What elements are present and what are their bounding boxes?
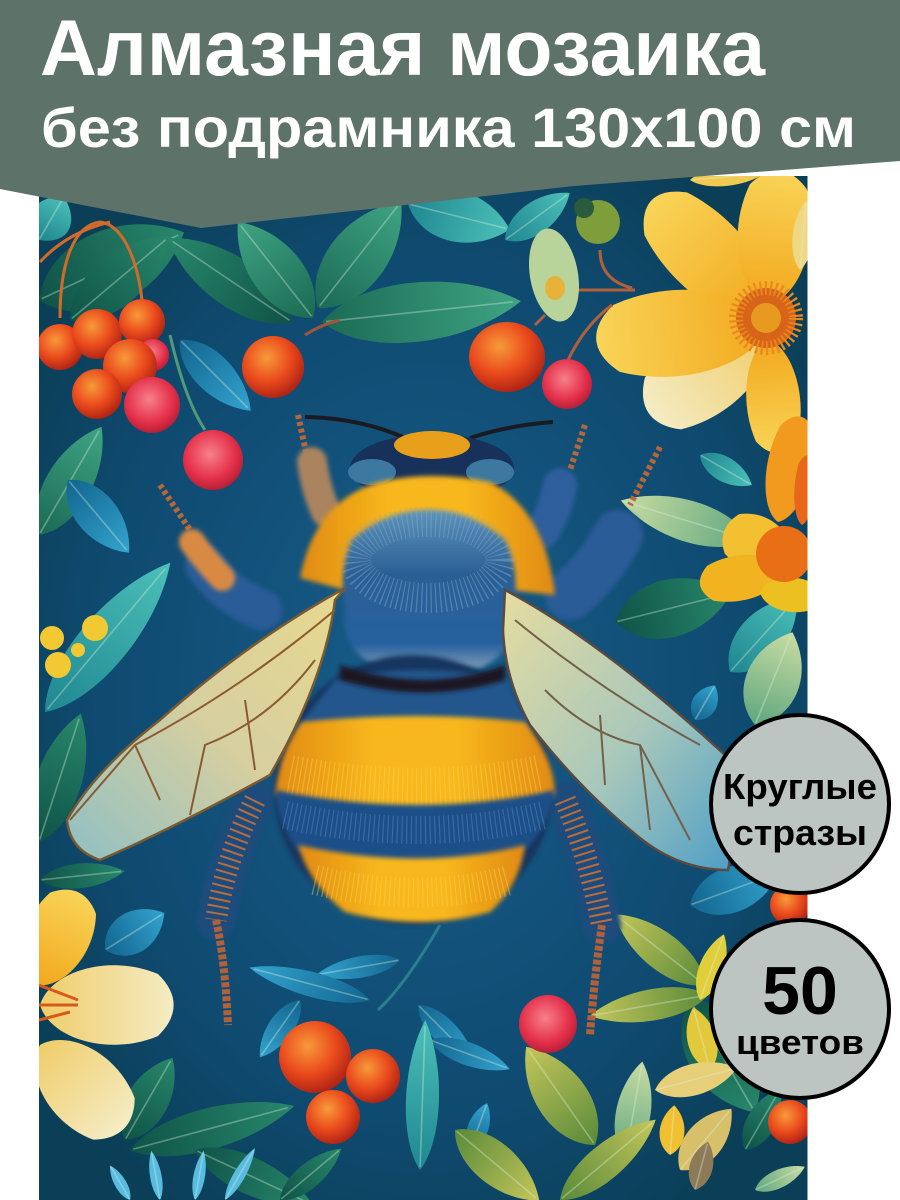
top right flower xyxy=(596,176,808,452)
top foliage xyxy=(21,179,579,424)
badge: 50 colours xyxy=(711,920,889,1098)
bottom left flower xyxy=(39,890,310,1200)
bee abdomen xyxy=(274,655,555,925)
yellow blossoms at left xyxy=(40,615,108,678)
badge: round rhinestones xyxy=(711,715,889,893)
bottom centre foliage xyxy=(246,925,667,1200)
blue stripe xyxy=(275,790,555,862)
upper yellow stripe xyxy=(275,716,555,810)
right wing xyxy=(503,590,730,870)
badge: round rhinestones: Круглые xyxy=(723,766,877,807)
small pale pod xyxy=(522,198,620,325)
lower yellow stripe xyxy=(298,845,525,922)
badge: 50 colours: 50 xyxy=(762,953,838,1029)
bee thorax xyxy=(343,510,516,668)
subtitle: без подрамника 130х100 см xyxy=(41,96,856,159)
right foliage xyxy=(608,170,823,926)
bee thorax collar xyxy=(300,476,555,595)
badge: 50 colours: цветов xyxy=(736,1024,864,1062)
thorax fur xyxy=(356,522,500,598)
upper dark band xyxy=(295,670,535,730)
berries xyxy=(37,299,812,1144)
left foliage xyxy=(39,426,170,956)
header banner xyxy=(0,0,900,228)
berry stems xyxy=(40,222,635,430)
left wing xyxy=(67,588,345,860)
lower yellow fur xyxy=(315,880,510,892)
bottom right flowers and leaves xyxy=(590,914,805,1192)
bee legs xyxy=(160,415,660,1035)
blue fur xyxy=(285,815,545,830)
badge: round rhinestones: стразы xyxy=(733,812,867,853)
bee xyxy=(67,415,730,1035)
panel: painting of a bumblebee xyxy=(6,164,823,1200)
upper yellow fur xyxy=(290,775,540,788)
collar dark line xyxy=(340,665,505,692)
title: Алмазная мозаика xyxy=(40,3,766,92)
right orange flower xyxy=(700,416,808,612)
bee head and antennae xyxy=(305,415,554,488)
bottom left blue sprigs xyxy=(110,1148,342,1200)
painting background xyxy=(39,176,808,1200)
